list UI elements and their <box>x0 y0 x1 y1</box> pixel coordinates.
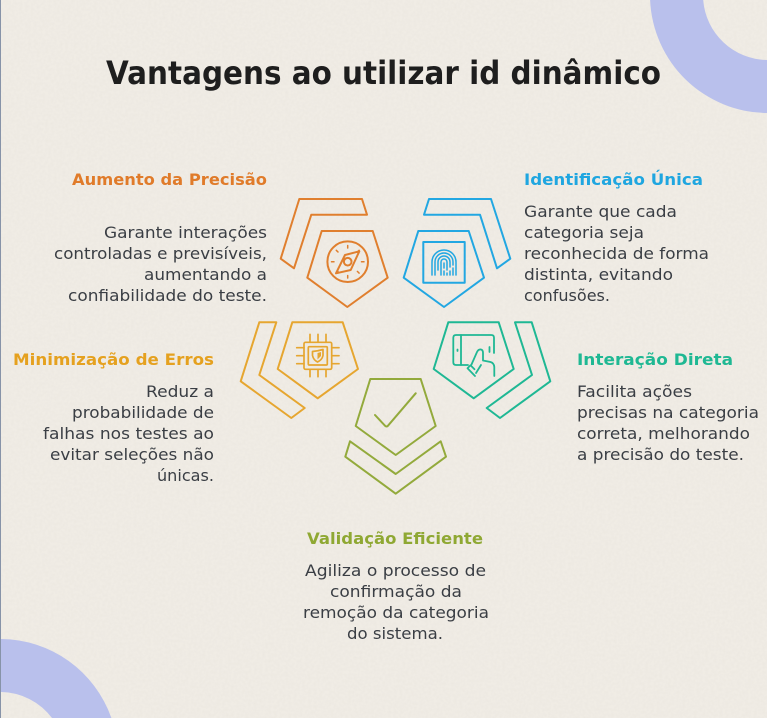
description: Identificação Única: categoria seja <box>524 223 644 242</box>
description: Aumento da Precisão: confiabilidade do teste. <box>68 286 267 305</box>
description: Validação Eficiente <box>303 561 489 643</box>
description: Interação Direta: Facilita ações <box>577 382 692 401</box>
description: Validação Eficiente: do sistema. <box>347 624 443 643</box>
heading: Aumento da Precisão: Aumento da Precisão <box>72 170 267 189</box>
teal pentagon segment <box>434 322 550 418</box>
icon: check mark <box>375 393 416 426</box>
icon: chip with shield <box>297 334 339 377</box>
title: Vantagens ao utilizar id dinâmico <box>106 54 661 92</box>
decorative ring: bottom left <box>1 639 111 718</box>
decorative ring: top right <box>650 0 767 113</box>
panel: Validação Eficiente text <box>303 529 489 643</box>
description: Aumento da Precisão: controladas e previsíveis, <box>54 244 267 263</box>
description: Aumento da Precisão <box>54 223 267 305</box>
description: Identificação Única: reconhecida de forma <box>524 244 709 263</box>
description: Minimização de Erros: únicas. <box>157 466 214 485</box>
panel: Minimização de Erros text <box>13 350 214 485</box>
description: Validação Eficiente: Agiliza o processo de <box>305 561 486 580</box>
icon: hand on tablet <box>453 335 494 376</box>
description: Minimização de Erros: evitar seleções não <box>50 445 214 464</box>
description: Identificação Única: Garante que cada <box>524 202 677 221</box>
description: Validação Eficiente: confirmação da <box>330 582 462 601</box>
description: Minimização de Erros: Reduz a <box>146 382 214 401</box>
description: Interação Direta <box>577 382 759 464</box>
description: Aumento da Precisão: Garante interações <box>104 223 267 242</box>
description: Minimização de Erros: falhas nos testes ao <box>43 424 214 443</box>
panel: Interação Direta text <box>577 350 759 464</box>
icon: compass <box>327 241 368 282</box>
description: Minimização de Erros <box>43 382 214 485</box>
heading: Interação Direta: Interação Direta <box>577 350 733 369</box>
description: Identificação Única: distinta, evitando <box>524 265 673 284</box>
blue pentagon segment <box>404 199 510 307</box>
yellow pentagon segment <box>241 322 358 418</box>
description: Minimização de Erros: probabilidade de <box>72 403 214 422</box>
description: Identificação Única: confusões. <box>524 286 610 305</box>
description: Validação Eficiente: remoção da categoria <box>303 603 489 622</box>
description: Interação Direta: precisas na categoria <box>577 403 759 422</box>
panel: Aumento da Precisão text <box>54 170 267 305</box>
orange pentagon segment <box>281 199 388 307</box>
olive pentagon segment <box>345 379 446 494</box>
heading: Identificação Única: Identificação Única <box>524 170 703 189</box>
description: Identificação Única <box>524 202 709 305</box>
description: Interação Direta: correta, melhorando <box>577 424 750 443</box>
icon: fingerprint <box>423 242 465 283</box>
description: Aumento da Precisão: aumentando a <box>144 265 267 284</box>
panel: Identificação Única text <box>524 170 709 305</box>
heading: Validação Eficiente: Validação Eficiente <box>307 529 483 548</box>
heading: Minimização de Erros: Minimização de Erros <box>13 350 214 369</box>
description: Interação Direta: a precisão do teste. <box>577 445 744 464</box>
